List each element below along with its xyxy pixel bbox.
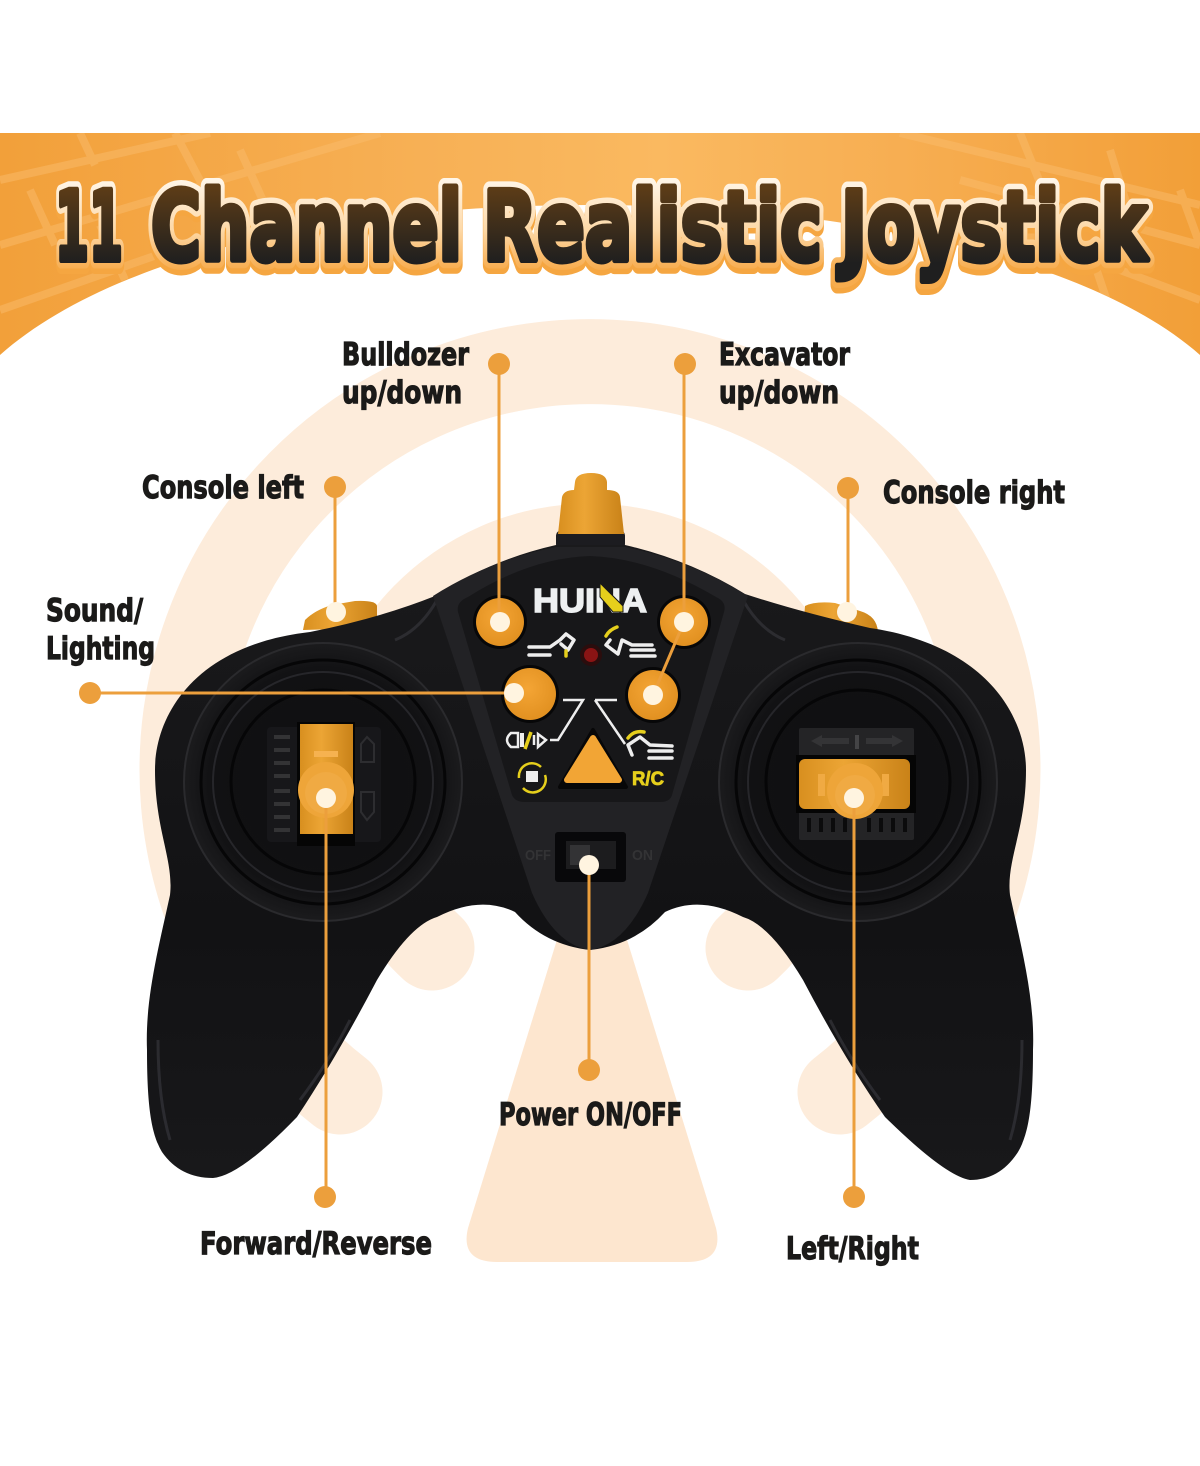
callout: console left: Console left — [142, 470, 304, 506]
title: Realistic — [483, 176, 822, 288]
joystick controller — [46, 337, 1065, 1267]
panel guide lines — [550, 700, 625, 744]
left joystick gate — [267, 722, 381, 846]
callout: bulldozer up/down: up/down — [342, 375, 462, 411]
callout: forward and reverse — [200, 788, 432, 1262]
callout: left and right: Left/Right — [786, 1231, 919, 1267]
icon: excavator lower — [628, 732, 672, 758]
header band with tyre-track texture — [0, 133, 1200, 358]
callout: sound and lighting: Lighting — [46, 631, 155, 667]
icon: excavator top — [606, 627, 655, 656]
body highlights — [158, 600, 1022, 1140]
LED — [580, 644, 602, 666]
top right button — [657, 595, 711, 649]
title — [55, 171, 1149, 288]
callout: console right — [837, 475, 1065, 622]
right shoulder button — [804, 602, 878, 632]
title: 11 — [55, 171, 123, 283]
callout: left and right — [786, 788, 919, 1267]
callout: sound and lighting: Sound/ — [46, 593, 144, 629]
antenna knob — [556, 473, 625, 550]
title: Channel — [151, 171, 462, 283]
mid left button — [501, 665, 559, 723]
power switch: OFF — [525, 847, 551, 864]
right joystick well — [719, 643, 997, 921]
title: Channel — [151, 176, 462, 288]
callout: bulldozer up/down — [342, 337, 510, 632]
power switch — [525, 832, 653, 882]
centre wedge — [433, 547, 748, 950]
title: Channel — [151, 171, 462, 283]
title: Realistic — [483, 171, 822, 283]
callout: power on and off — [499, 855, 682, 1133]
mid right button — [625, 667, 681, 723]
icon: bulldozer — [529, 634, 574, 656]
icon: lamp and horn — [507, 732, 546, 749]
callout: excavator up/down: up/down — [719, 375, 839, 411]
icon: rotate vehicle — [519, 763, 546, 792]
power switch: ON — [632, 847, 653, 864]
callout: forward and reverse: Forward/Reverse — [200, 1226, 432, 1262]
title: Realistic — [483, 171, 822, 283]
title: 11 — [55, 171, 123, 283]
callout: console right: Console right — [883, 475, 1065, 511]
triangle R/C button — [560, 730, 626, 787]
right joystick gate — [796, 728, 916, 840]
callout: bulldozer up/down: Bulldozer — [342, 337, 470, 373]
callout: sound and lighting — [46, 593, 524, 704]
top left button — [473, 595, 527, 649]
callout: excavator up/down: Excavator — [719, 337, 851, 373]
controller body — [147, 545, 1033, 1180]
title: 11 — [55, 176, 123, 288]
R/C label: R/C — [632, 769, 664, 790]
callout: console left — [142, 470, 346, 622]
callout: excavator up/down — [643, 337, 851, 705]
brand logo: HUINA — [533, 582, 647, 619]
left joystick well — [184, 643, 462, 921]
left shoulder button — [303, 601, 377, 630]
background signal icon — [182, 362, 998, 1262]
control panel — [458, 556, 725, 802]
callout: power on and off: Power ON/OFF — [499, 1097, 682, 1133]
